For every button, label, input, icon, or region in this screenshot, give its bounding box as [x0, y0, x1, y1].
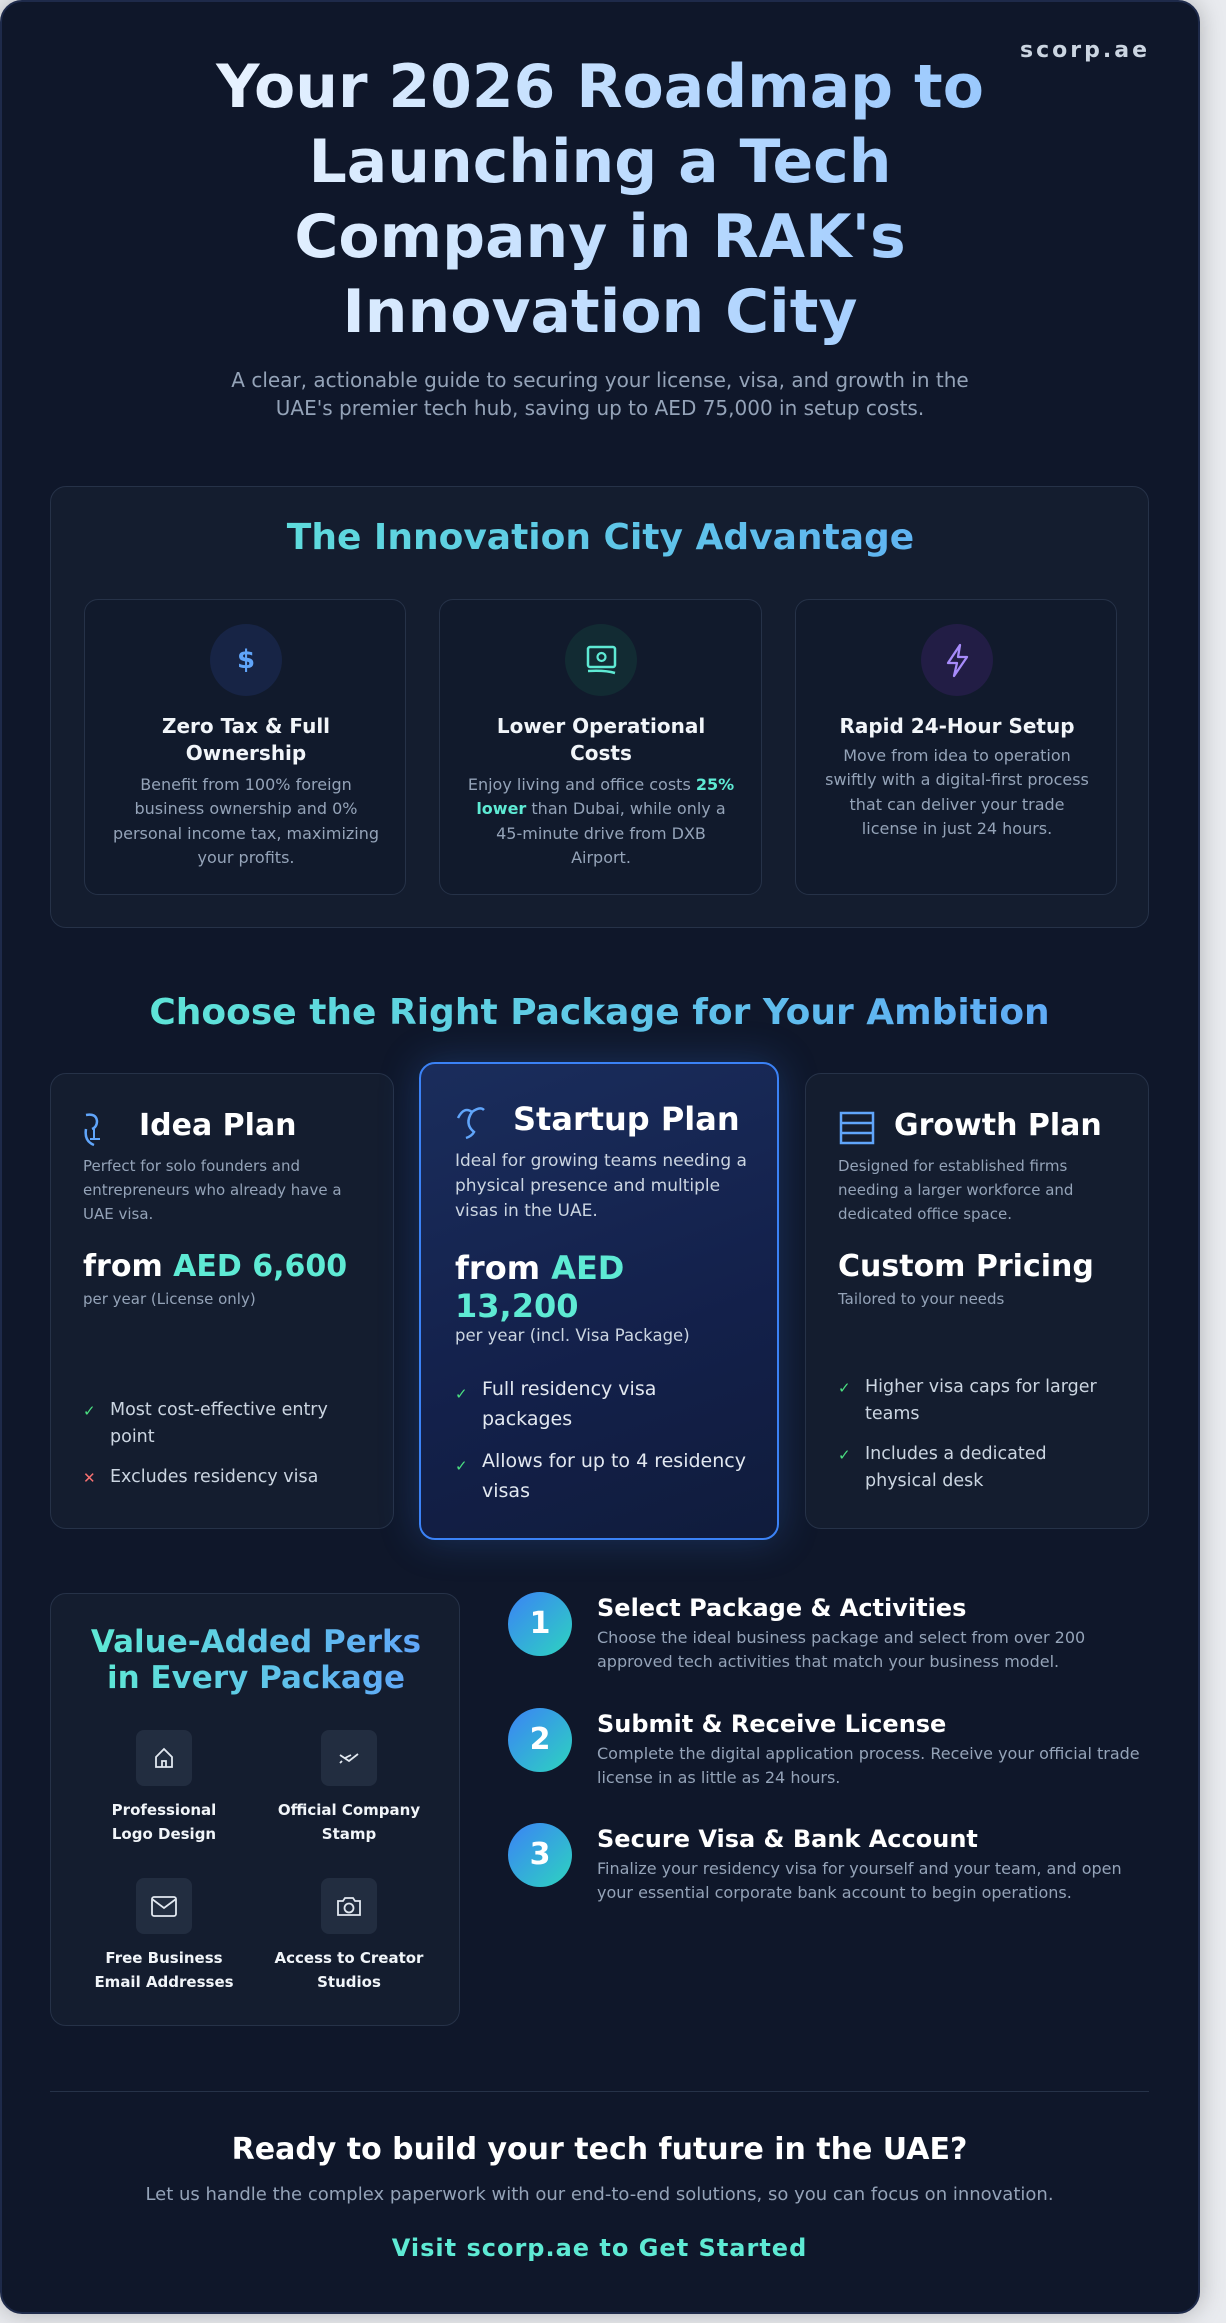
perk: email: Email Addresses	[94, 1973, 234, 1991]
text: zero tax: Zero Tax & Full Ownership	[162, 714, 330, 765]
text: zero tax: Benefit from 100% foreign business ownership and 0% personal income tax, maximizing your profits.	[113, 775, 379, 867]
features: Most cost-effective entry point	[110, 1400, 328, 1447]
features	[83, 1400, 328, 1487]
icon: building	[840, 1112, 874, 1144]
plan: idea: per year (License only)	[83, 1290, 256, 1308]
text 1: Select Package & Activities	[597, 1594, 966, 1622]
features: ✓	[838, 1379, 851, 1397]
plan: growth	[805, 1073, 1149, 1529]
text 3: Finalize your residency visa for yourself and your team, and open your essential corporate bank account to begin operations.	[597, 1859, 1122, 1902]
text 2: Complete the digital application process. Receive your official trade license in as little as 24 hours.	[597, 1744, 1140, 1787]
badge 1	[508, 1592, 572, 1656]
text: lower costs: Enjoy living and office costs 25% lower than Dubai, while only a 45-minute drive from DXB Airport.	[468, 775, 734, 867]
plan: startup	[419, 1062, 779, 1540]
title: startup: Startup Plan	[513, 1100, 740, 1138]
heading: advantage	[51, 515, 1150, 561]
perk: logo: Logo Design	[112, 1825, 216, 1843]
features: Includes a dedicated physical desk	[865, 1444, 1047, 1491]
subtitle: A clear, actionable guide to securing your license, visa, and growth in the UAE's premier tech hub, saving up to AED 75,000 in setup costs.	[231, 368, 969, 420]
perk: logo: Professional	[112, 1801, 216, 1819]
card: rapid setup	[795, 599, 1117, 895]
text 3: Secure Visa & Bank Account	[597, 1825, 978, 1853]
features: Higher visa caps for larger teams	[865, 1377, 1097, 1424]
perk: email: Free Business	[105, 1949, 223, 1967]
text 3	[597, 1825, 1122, 1902]
title: growth: Growth Plan	[894, 1108, 1102, 1143]
heading: packages: Choose the Right Package for Your Ambition	[149, 992, 1050, 1033]
text: rapid: Move from idea to operation swiftly with a digital-first process that can deliver your trade license in just 24 hours.	[825, 746, 1089, 838]
badge 3	[508, 1823, 572, 1887]
title: idea: Idea Plan	[139, 1108, 297, 1143]
panel: perks	[50, 1593, 460, 2026]
plan: startup: per year (incl. Visa Package)	[455, 1326, 690, 1345]
cta heading: Ready to build your tech future in the UAE?	[232, 2132, 967, 2167]
perk: stamp: Stamp	[322, 1825, 376, 1843]
features: Excludes residency visa	[110, 1467, 318, 1487]
card: lower costs	[439, 599, 762, 895]
text: lower costs: Lower Operational Costs	[497, 714, 705, 765]
badge 1: 1	[530, 1606, 550, 1641]
text 1	[597, 1594, 1085, 1671]
price: from AED 13,200	[455, 1249, 624, 1325]
perk: stamp: Official Company	[278, 1801, 420, 1819]
perk: camera	[274, 1878, 424, 1991]
perk: logo	[112, 1730, 216, 1843]
features	[838, 1377, 1097, 1491]
features: ✕	[83, 1469, 96, 1487]
icon: lightning	[921, 624, 993, 696]
icon: dollar	[210, 624, 282, 696]
desc: Perfect for solo founders and entrepreneurs who already have a UAE visa.	[83, 1157, 342, 1223]
icon: idea	[84, 1113, 100, 1146]
heading: perks: Value-Added Perks in Every Package	[91, 1624, 421, 1696]
text 1: Choose the ideal business package and select from over 200 approved tech activities that match your business model.	[597, 1628, 1085, 1671]
plan: growth: Tailored to your needs	[838, 1290, 1004, 1308]
features: ✓	[83, 1402, 96, 1420]
icon: rocket	[457, 1107, 485, 1140]
perk: stamp	[278, 1730, 420, 1843]
step 2	[508, 1708, 1140, 1787]
text: lower costs	[468, 714, 734, 867]
desc: Ideal for growing teams needing a physical presence and multiple visas in the UAE.	[455, 1151, 747, 1221]
desc: Designed for established firms needing a larger workforce and dedicated office space.	[838, 1157, 1073, 1223]
perk: email	[94, 1878, 234, 1991]
features: ✓	[838, 1446, 851, 1464]
title: Your 2026 Roadmap to Launching a Tech Company in RAK's Innovation City	[216, 52, 984, 347]
badge 2	[508, 1708, 572, 1772]
features: ✓	[455, 1385, 468, 1403]
brand label: scorp.ae	[1020, 38, 1150, 63]
text 2	[597, 1710, 1140, 1787]
perk: camera: Studios	[317, 1973, 381, 1991]
text: rapid: Rapid 24-Hour Setup	[839, 714, 1075, 738]
step 3	[508, 1823, 1122, 1902]
features: Allows for up to 4 residency visas	[482, 1450, 746, 1502]
cta link: Visit scorp.ae to Get Started	[392, 2234, 807, 2262]
features: Full residency visa packages	[482, 1378, 656, 1430]
badge 3: 3	[530, 1837, 550, 1872]
text: zero tax	[113, 714, 379, 867]
price: from AED 6,600	[83, 1249, 347, 1284]
cta text: Let us handle the complex paperwork with our end-to-end solutions, so you can focus on innovation.	[145, 2184, 1054, 2205]
plan: idea	[50, 1073, 394, 1529]
text 2: Submit & Receive License	[597, 1710, 946, 1738]
price: Custom Pricing	[838, 1249, 1094, 1284]
icon: money	[565, 624, 637, 696]
icon: dollar: $	[237, 645, 255, 675]
step 1	[508, 1592, 1085, 1671]
heading: advantage: The Innovation City Advantage	[287, 517, 914, 558]
card: zero tax	[84, 599, 406, 895]
badge 2: 2	[530, 1722, 550, 1757]
features: ✓	[455, 1457, 468, 1475]
features	[455, 1378, 746, 1502]
perk: camera: Access to Creator	[275, 1949, 423, 1967]
panel: advantage	[50, 486, 1149, 928]
